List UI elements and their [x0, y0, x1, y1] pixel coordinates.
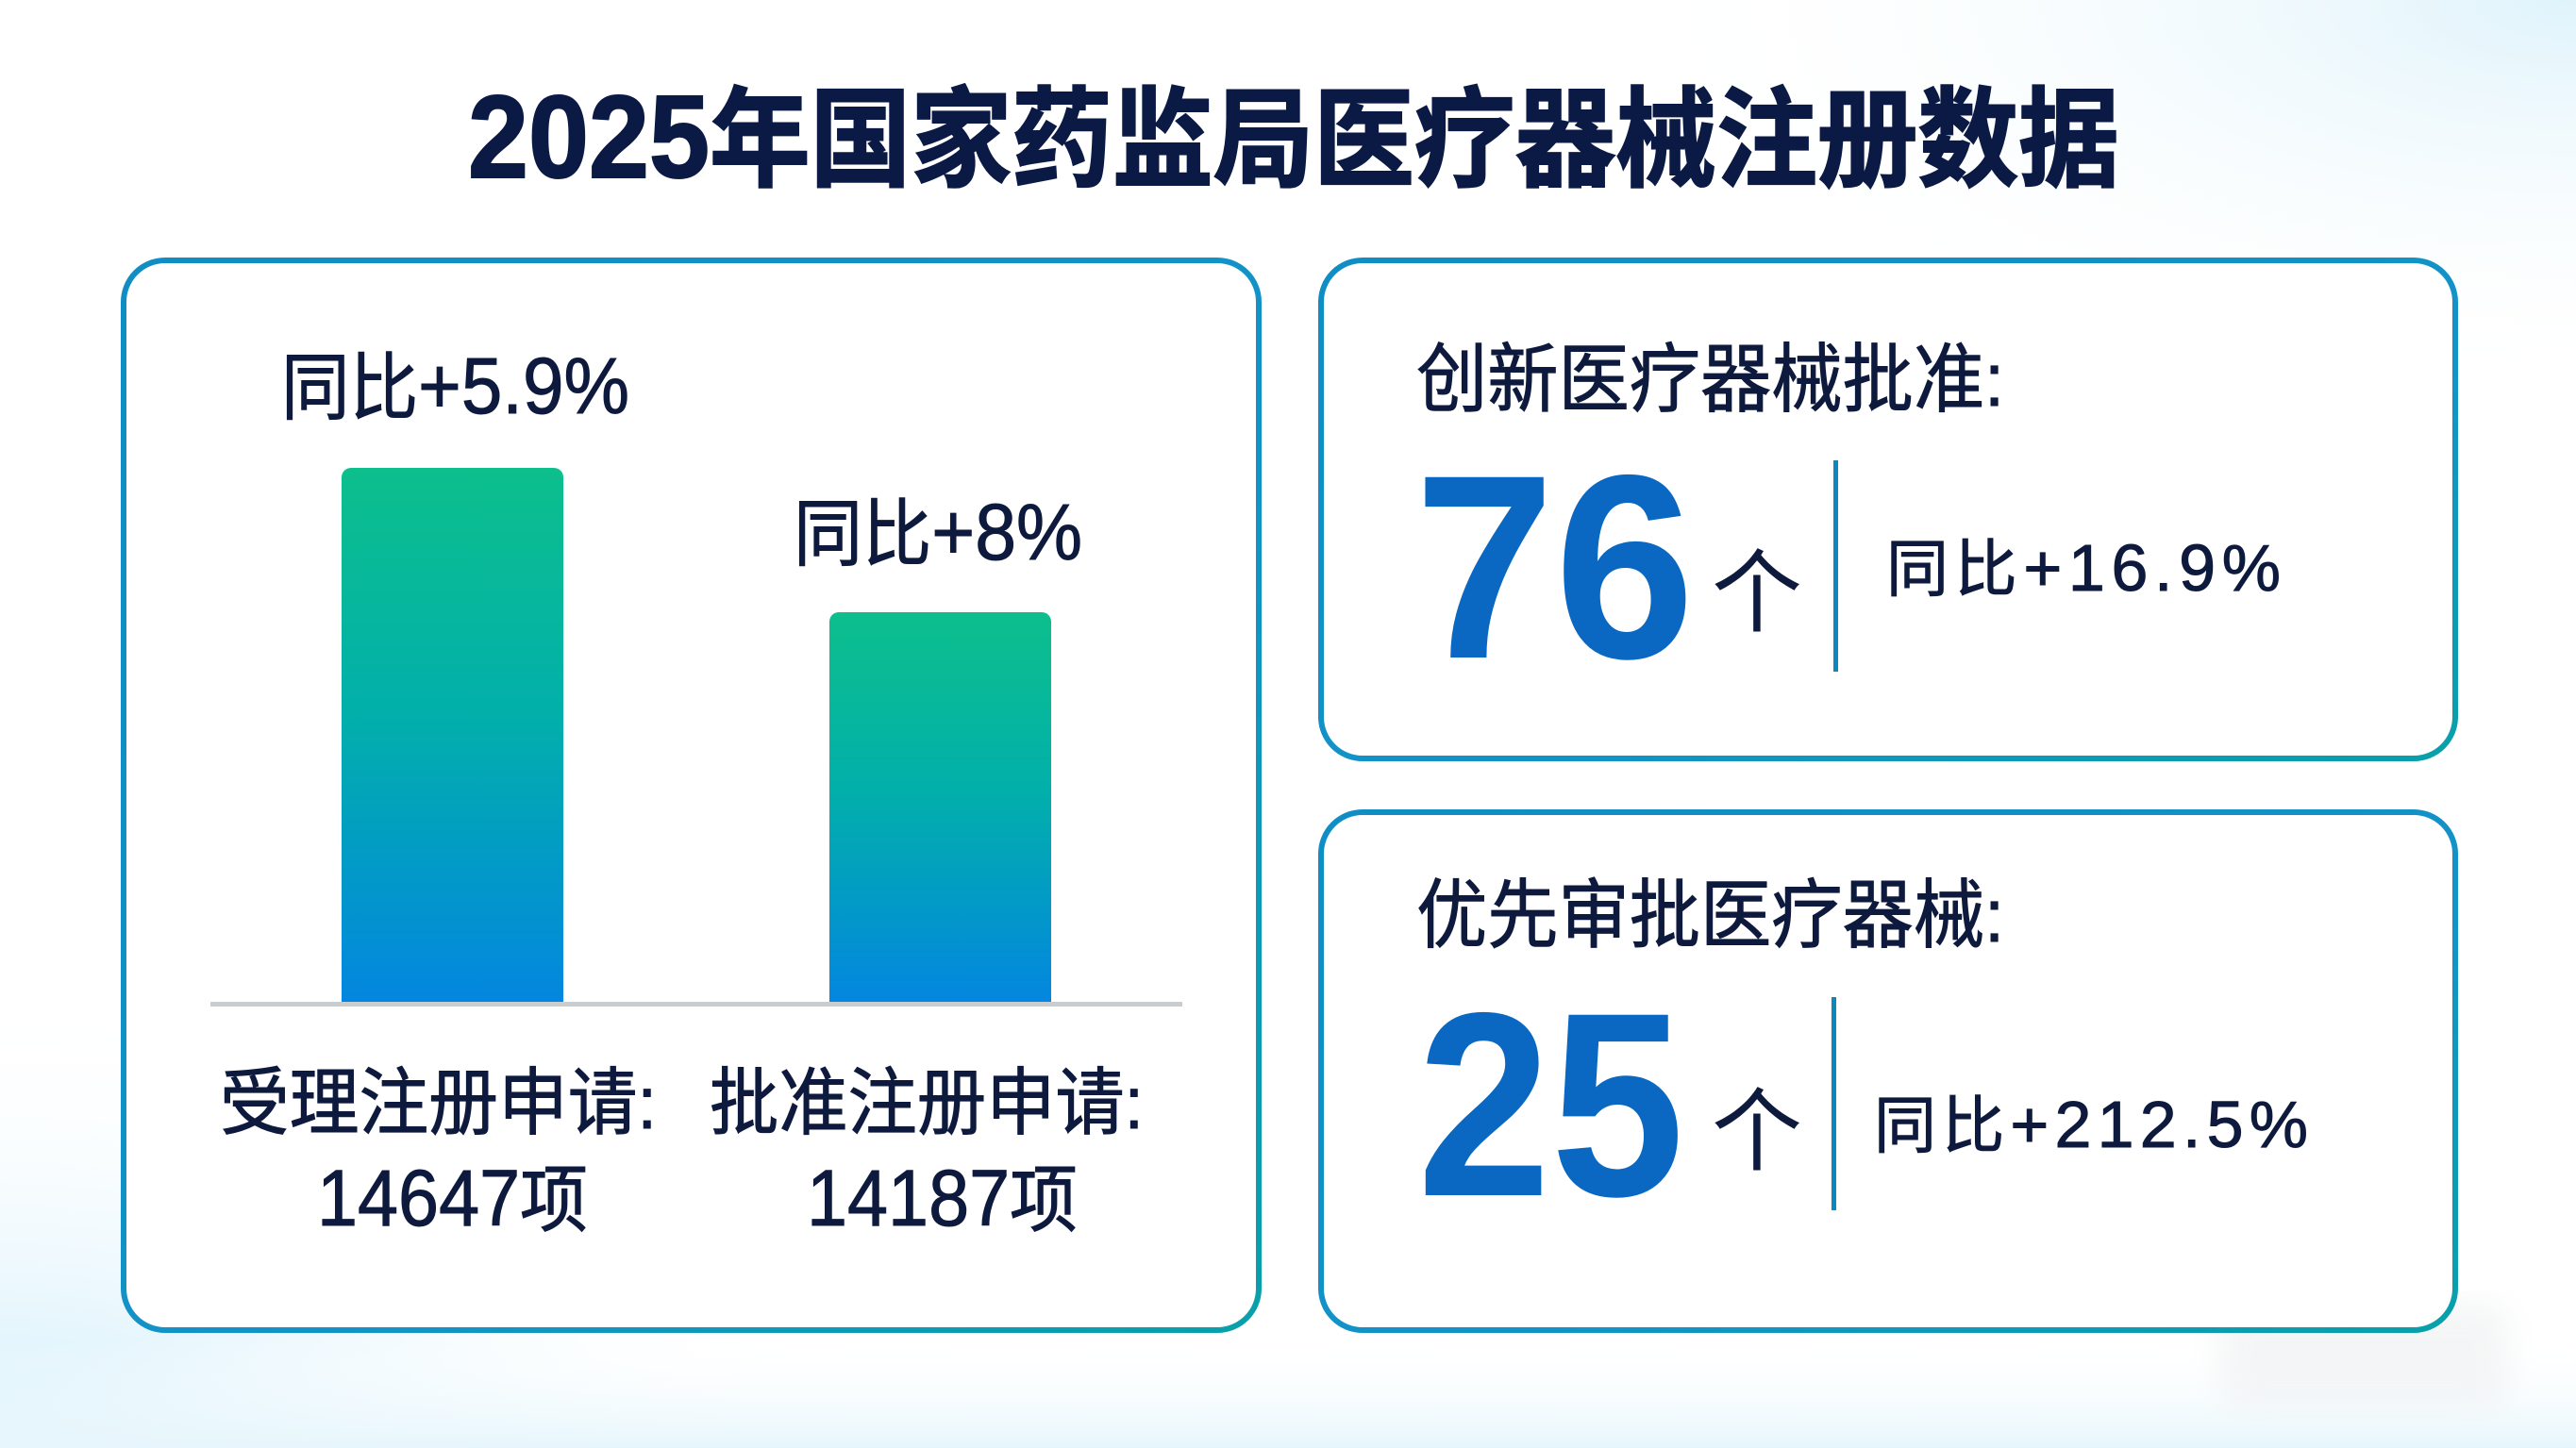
- label: approved growth: 同比+8%: [794, 488, 1082, 576]
- chart axis: [210, 1002, 1182, 1007]
- panel frame: [1321, 260, 2455, 758]
- bar: approved applications: [829, 612, 1051, 1004]
- big number 76: 76: [1414, 420, 1695, 713]
- panel frame: [124, 260, 1259, 1330]
- bar: accepted applications: [342, 468, 563, 1004]
- panel: innovative devices approved: [1321, 260, 2455, 758]
- panel frame: [1321, 812, 2455, 1330]
- big number 25: 25: [1417, 957, 1684, 1251]
- value: accepted applications: 14647项: [317, 1154, 588, 1242]
- panel heading: 创新医疗器械批准:: [1416, 338, 2004, 422]
- title: 2025年国家药监局医疗器械注册数据: [468, 73, 2119, 203]
- label: accepted applications: 受理注册申请:: [220, 1061, 657, 1144]
- panel heading: 优先审批医疗器械:: [1416, 874, 2004, 957]
- unit: 个: [1712, 1082, 1802, 1183]
- panel: registration applications bar chart: [124, 260, 1259, 1330]
- value: approved applications: 14187项: [807, 1154, 1078, 1242]
- growth rate: 同比+212.5%: [1874, 1088, 2308, 1161]
- unit: 个: [1712, 543, 1802, 644]
- panel: priority review devices: [1321, 812, 2455, 1330]
- label: accepted growth: 同比+5.9%: [281, 341, 629, 430]
- vertical divider: [1833, 460, 1838, 672]
- label: approved applications: 批准注册申请:: [710, 1061, 1144, 1144]
- growth rate: 同比+16.9%: [1886, 531, 2281, 605]
- vertical divider: [1832, 997, 1836, 1210]
